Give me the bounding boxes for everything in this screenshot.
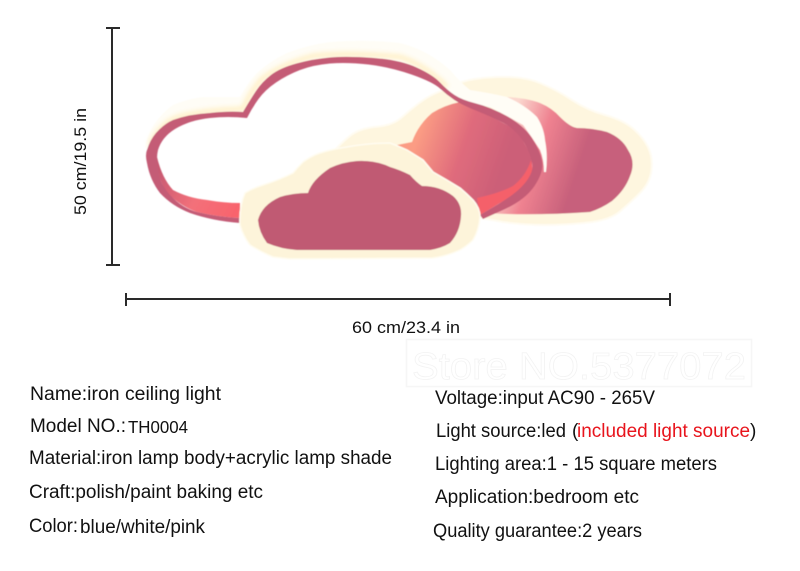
spec: voltage: Voltage:input AC90 - 265V (435, 388, 655, 409)
spec: color: Color: (29, 516, 78, 537)
spec: craft: Craft:polish/paint baking etc (29, 482, 263, 503)
spec: model number (30, 416, 188, 437)
disc lower rim (477, 160, 533, 215)
spec: light source: ) (750, 421, 756, 442)
spec: light source: included light source (577, 421, 750, 442)
spec: model number: TH0004 (128, 417, 188, 437)
right cloud pink panel (480, 97, 633, 214)
store watermark: Store NO.5377072 (412, 346, 746, 388)
ring light shade (145, 41, 547, 172)
width label: 60 cm/23.4 in (352, 318, 460, 337)
spec: material: Material:iron lamp body+acrylic lamp shade (29, 448, 392, 469)
spec: name: Name:iron ceiling light (30, 384, 222, 405)
front cloud pink panel (258, 161, 461, 250)
spec: light source: ( (572, 421, 579, 442)
ring pink frame (146, 57, 542, 223)
spec: color: blue/white/pink (80, 517, 205, 538)
front cloud shade (240, 143, 480, 259)
width dimension line (126, 293, 670, 306)
middle disc face (397, 102, 532, 215)
spec: model number: Model NO.: (30, 416, 126, 437)
height label: 50 cm/19.5 in (71, 108, 90, 215)
spec: light source: Light source:led (436, 421, 566, 442)
height dimension line (106, 28, 120, 265)
spec: light source (436, 421, 756, 442)
specs: left column (29, 384, 392, 538)
spec: application: Application:bedroom etc (435, 487, 639, 508)
spec: color (29, 516, 205, 538)
lamp illustration: three clouds (145, 41, 652, 259)
right cloud shade (335, 77, 652, 225)
warm glow along ring edge (150, 54, 447, 145)
ring inner band (155, 157, 240, 218)
spec: lighting area: Lighting area:1 - 15 square meters (435, 454, 717, 475)
spec: quality guarantee: Quality guarantee:2 years (433, 521, 642, 542)
specs: right column (433, 388, 756, 542)
